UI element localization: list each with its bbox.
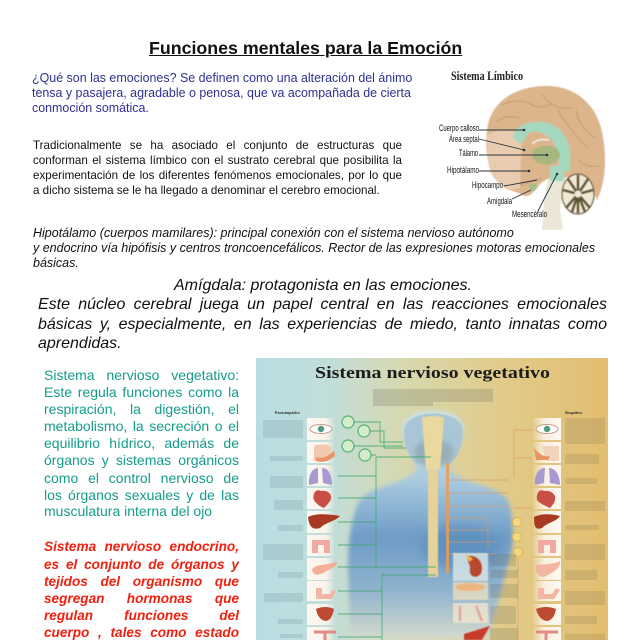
text block: definition of emotions: ¿Qué son las emociones? Se definen como una alteración del ánimo — [32, 71, 412, 85]
icon: heart — [313, 490, 331, 508]
figure: limbic system brain — [439, 69, 606, 230]
icon: reproductive right — [536, 632, 558, 640]
inset captions — [490, 554, 518, 640]
ganglia — [342, 416, 371, 461]
text block: limbic system: experimentación de los diferentes fenómenos emocionales, por lo que — [33, 169, 402, 182]
figure: limbic system brain: Hipotálamo — [447, 165, 479, 175]
figure: limbic system brain: Área septal — [449, 134, 479, 144]
brain cerebrum — [486, 86, 605, 200]
amygdala — [529, 183, 537, 191]
text block: amygdala description — [38, 296, 607, 352]
text block: definition of emotions: tensa y pasajera, agradable o penosa, que va acompañada de cierta — [32, 86, 411, 100]
icon: bladder right — [536, 607, 556, 621]
text block: vegetative nervous system: como el control nervioso de — [44, 470, 239, 486]
figure: limbic system brain: Cuerpo calloso — [439, 123, 479, 133]
labels and leader lines — [479, 130, 557, 211]
text block: definition of emotions: conmoción somática. — [32, 101, 149, 115]
text block: endocrine nervous system: regulan funciones del — [44, 608, 239, 623]
text block: vegetative nervous system: equilibrio hídrico, además de — [44, 435, 239, 451]
text block: hypothalamus — [32, 226, 595, 270]
poster intro text — [373, 389, 493, 406]
icon: eye right — [536, 424, 558, 434]
heading: amygdala: Amígdala: protagonista en las emociones. — [174, 277, 472, 294]
icon: intestine — [312, 540, 330, 553]
icon: salivary gland — [314, 444, 335, 462]
text block: amygdala description: básicas y, especialmente, en las experiencias de miedo, tanto innatas como — [38, 316, 607, 333]
thalamus — [532, 146, 560, 164]
nerve lines — [338, 422, 436, 640]
title: Funciones mentales para la Emoción — [149, 38, 462, 58]
icon: heart right — [537, 490, 555, 508]
column headings: Parasimpático — [275, 410, 300, 415]
face shading — [414, 439, 454, 467]
text block: limbic system — [33, 139, 402, 197]
text block: vegetative nervous system: los órganos sexuales y de las — [44, 487, 239, 503]
text block: amygdala description: aprendidas. — [38, 335, 122, 352]
figure: limbic system brain: Mesencéfalo — [512, 209, 547, 219]
icon: salivary gland right — [534, 446, 559, 461]
icon: pancreas — [312, 562, 337, 575]
text block: vegetative nervous system: Sistema nervioso vegetativo: — [44, 367, 239, 383]
text block: vegetative nervous system — [44, 367, 240, 519]
text block: limbic system: a dicho sistema se le ha llegado a denominar el cerebro emocional. — [33, 184, 380, 197]
poster: vegetative nervous system — [256, 358, 608, 640]
text block: hypothalamus: y endocrino vía hipófisis y centros troncoencefálicos. Rector de las expresiones motoras emocionales — [33, 241, 595, 255]
text block: hypothalamus: Hipotálamo (cuerpos mamilares): principal conexión con el sistema nervioso autónomo — [33, 226, 514, 240]
icon: reproductive organs — [314, 632, 336, 640]
text block: definition of emotions — [32, 71, 412, 115]
right organ column — [533, 418, 561, 640]
brain stem — [542, 178, 566, 230]
text block: hypothalamus: básicas. — [33, 256, 79, 270]
icon: bladder — [316, 607, 334, 621]
icon: liver — [308, 514, 340, 529]
right captions — [565, 418, 605, 640]
column headings — [275, 410, 582, 415]
text block: vegetative nervous system: Este regula funciones como la — [44, 384, 239, 400]
head — [404, 414, 463, 464]
text block: vegetative nervous system: metabolismo, la secreción o el — [44, 418, 239, 434]
figure: limbic system brain: Tálamo — [459, 148, 478, 158]
midbrain — [550, 166, 564, 181]
text block: vegetative nervous system: musculatura interna del ojo — [44, 503, 212, 519]
text block: endocrine nervous system: segregan hormonas que — [44, 591, 239, 606]
figure: limbic system brain: Amígdala — [487, 196, 512, 206]
text block: vegetative nervous system: respiración, la digestión, el — [44, 401, 239, 417]
body figure — [348, 411, 513, 640]
text block: endocrine nervous system: Sistema nervioso endocrino, — [44, 539, 239, 554]
chest shading — [421, 526, 501, 570]
column headings: Simpático — [565, 410, 582, 415]
icon: eye — [310, 424, 332, 434]
icon: pancreas right — [535, 561, 560, 577]
left captions — [263, 420, 303, 638]
figure: limbic system brain: Hipocampo — [472, 180, 503, 190]
left organ column — [307, 418, 340, 640]
text block: amygdala description: Este núcleo cerebral juega un papel central en las reacciones emocionales — [38, 296, 607, 313]
text block: endocrine nervous system: es el conjunto de órganos y — [44, 557, 239, 572]
icon: lungs right — [535, 468, 560, 485]
text block: endocrine nervous system: tejidos del organismo que — [44, 574, 239, 589]
icon: lungs — [309, 468, 332, 485]
icon: intestine right — [538, 540, 556, 553]
cerebellum — [562, 174, 594, 214]
cingulate green band — [513, 122, 570, 172]
spine — [428, 470, 438, 577]
text block: limbic system: Tradicionalmente se ha asociado el conjunto de estructuras que — [33, 139, 402, 152]
icon: stomach right — [538, 588, 560, 599]
text block: endocrine nervous system — [44, 539, 239, 640]
text block: vegetative nervous system: órganos y sistemas orgánicos — [44, 452, 239, 468]
heading: Sistema Límbico: Sistema Límbico — [451, 69, 523, 83]
icon: stomach and duodenum — [316, 588, 336, 599]
text block: endocrine nervous system: cuerpo , tales como estado — [44, 625, 239, 640]
icon: liver right — [534, 514, 560, 529]
poster title: Sistema nervioso vegetativo — [315, 363, 550, 382]
text block: limbic system: conforman el sistema límbico con el sustrato cerebral que posibilita la — [33, 154, 402, 167]
kidney inset — [453, 553, 490, 640]
